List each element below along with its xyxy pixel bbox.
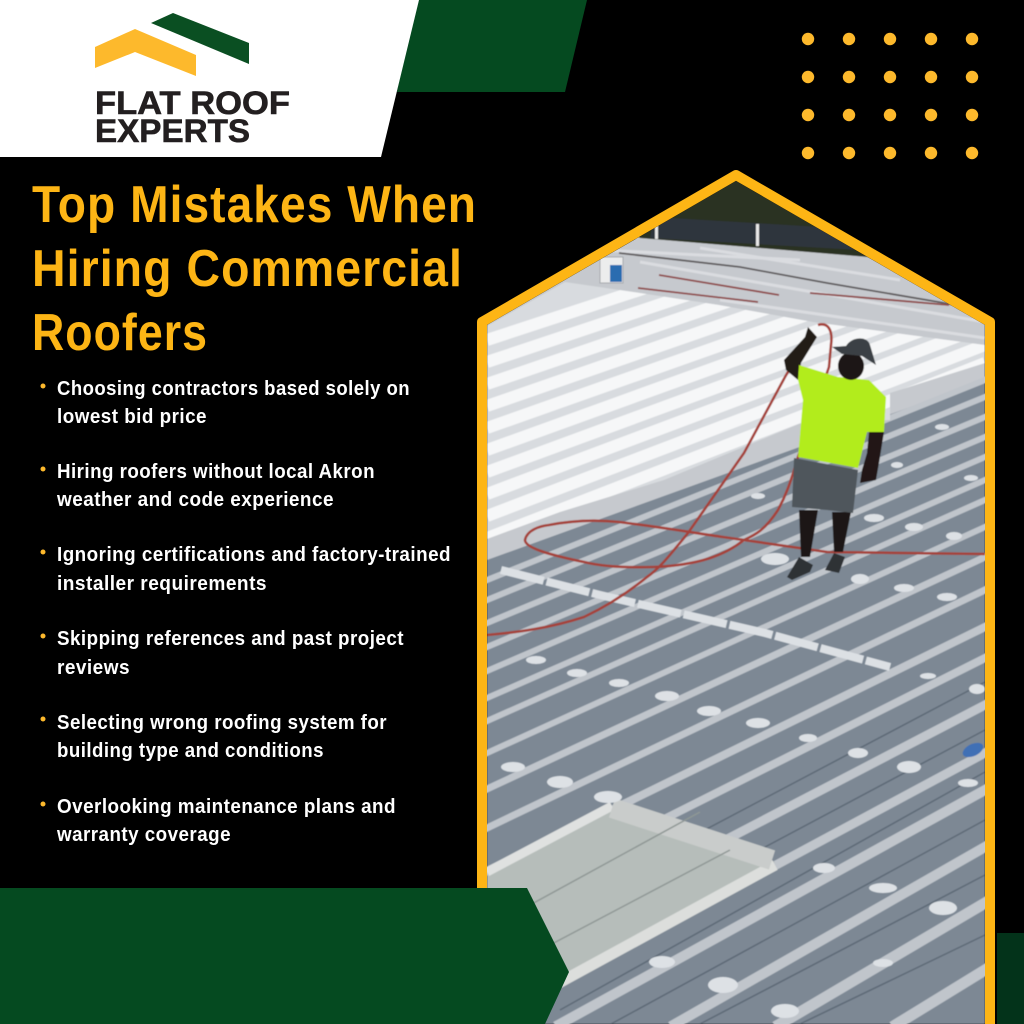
logo wordmark bbox=[95, 85, 290, 149]
bullet 4: Skipping references and past project bbox=[57, 628, 404, 650]
title: Top Mistakes When bbox=[32, 176, 477, 234]
repaired light roof panel bbox=[487, 806, 775, 1000]
bullet 6 bbox=[40, 796, 396, 846]
photo: roofer on commercial metal roof bbox=[487, 170, 986, 1024]
bullet 1 bbox=[40, 378, 410, 428]
bullet 3: Ignoring certifications and factory-trained bbox=[57, 544, 451, 566]
bullet list bbox=[40, 378, 451, 846]
head and beard bbox=[838, 352, 864, 380]
white roof patches bbox=[501, 424, 985, 1018]
top green parallelogram bbox=[397, 0, 587, 92]
title bbox=[32, 176, 477, 362]
metal panel seams bbox=[487, 380, 985, 1024]
far roof section bbox=[487, 170, 985, 560]
logo icon: roof chevrons bbox=[95, 13, 249, 76]
legs bbox=[799, 510, 818, 557]
bullet 4 bbox=[40, 628, 404, 679]
title: Roofers bbox=[32, 304, 208, 362]
bullet 6: Overlooking maintenance plans and bbox=[57, 796, 396, 818]
bullet 2: weather and code experience bbox=[56, 489, 334, 511]
right forearm bbox=[860, 432, 884, 483]
logo wordmark: FLAT ROOF bbox=[95, 85, 290, 121]
bullet 3 bbox=[40, 544, 451, 595]
white coated roof section bbox=[487, 282, 985, 539]
hat bbox=[832, 338, 876, 365]
shoes bbox=[787, 557, 813, 580]
white seam tape bbox=[501, 570, 890, 667]
bullet 4: reviews bbox=[57, 657, 130, 679]
blue bottle debris bbox=[962, 742, 984, 758]
bullet 3: installer requirements bbox=[57, 573, 267, 595]
gold house-shaped frame bbox=[482, 175, 990, 1024]
logo wordmark: EXPERTS bbox=[95, 113, 250, 149]
red hose behind worker bbox=[487, 324, 985, 635]
worker in hi-vis shirt bbox=[784, 327, 886, 580]
bucket bbox=[600, 257, 623, 283]
bullet 6: warranty coverage bbox=[56, 824, 231, 846]
decorative dot grid bbox=[802, 33, 978, 159]
title: Hiring Commercial bbox=[32, 240, 463, 298]
bottom green panel bbox=[0, 888, 569, 1024]
bullet 5: building type and conditions bbox=[57, 740, 324, 762]
bullet 5: Selecting wrong roofing system for bbox=[57, 712, 387, 734]
shirt bbox=[798, 365, 886, 468]
bullet 1: Choosing contractors based solely on bbox=[57, 378, 410, 400]
bullet 2: Hiring roofers without local Akron bbox=[57, 461, 375, 483]
bullet 2 bbox=[40, 461, 375, 511]
bullet 5 bbox=[40, 712, 387, 762]
bullet 1: lowest bid price bbox=[57, 406, 207, 428]
raised arm bbox=[784, 327, 817, 380]
shorts bbox=[792, 458, 858, 513]
distant hoses bbox=[619, 253, 956, 305]
bottom right green corner bbox=[997, 933, 1024, 1024]
thin dark panel lines bbox=[560, 682, 985, 1024]
logo panel bbox=[0, 0, 419, 157]
